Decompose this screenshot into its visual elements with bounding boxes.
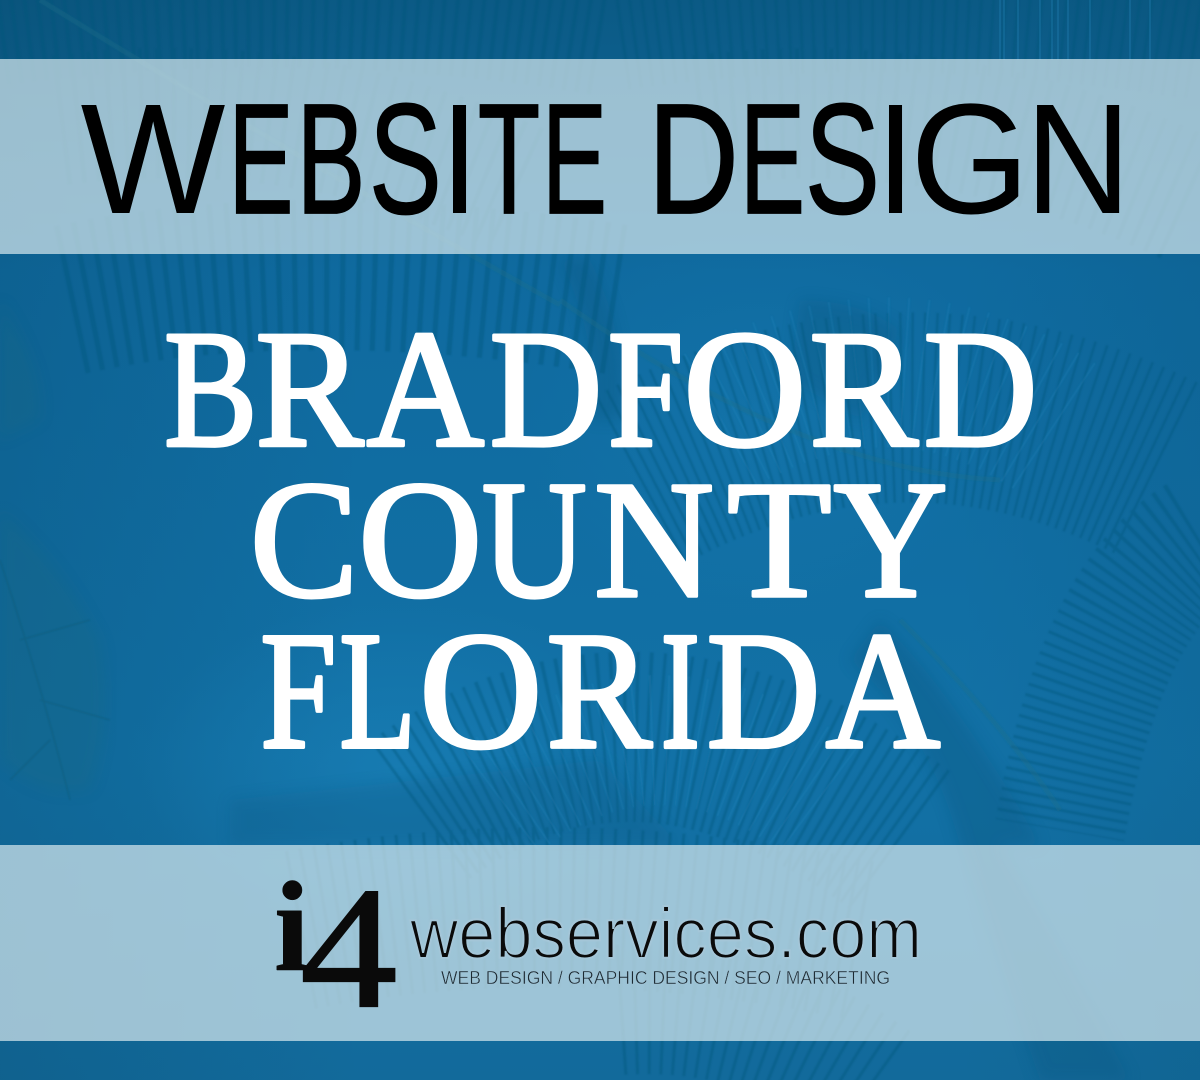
band: top heading bbox=[0, 59, 1200, 254]
main title: Bradford County Florida: C bbox=[250, 447, 358, 633]
heading: Website Design: E bbox=[542, 71, 607, 247]
heading: Website Design: N bbox=[1025, 72, 1131, 247]
main title: Bradford County Florida: A bbox=[366, 296, 484, 482]
main title: Bradford County Florida: B bbox=[164, 297, 257, 482]
band: bottom logo bbox=[0, 845, 1200, 1041]
logo mark: i4: 4 bbox=[300, 852, 397, 1044]
main title: Bradford County Florida: O bbox=[683, 296, 806, 482]
main title: Bradford County Florida: U bbox=[482, 446, 587, 632]
main title: Bradford County Florida: O bbox=[358, 446, 482, 633]
main title: Bradford County Florida bbox=[164, 295, 1038, 784]
main title: Bradford County Florida: D bbox=[706, 599, 821, 784]
main title: Bradford County Florida: F bbox=[608, 297, 683, 483]
logo tagline: WEB DESIGN / GRAPHIC DESIGN / SEO / MARKETING bbox=[441, 967, 890, 988]
logo wordmark: webservices.com bbox=[409, 895, 922, 974]
main title: Bradford County Florida: Y bbox=[834, 448, 948, 633]
heading: Website Design: E bbox=[228, 71, 293, 247]
logo: i4 webservices.com bbox=[274, 852, 922, 1044]
heading: Website Design bbox=[81, 70, 1131, 247]
main title: Bradford County Florida: F bbox=[260, 599, 336, 784]
main title: Bradford County Florida: D bbox=[489, 296, 602, 483]
logo mark: i4: i bbox=[274, 855, 310, 998]
main title: Bradford County Florida: R bbox=[255, 296, 364, 482]
main title: Bradford County Florida: R bbox=[546, 598, 652, 784]
main title: Bradford County Florida: T bbox=[727, 447, 832, 633]
heading: Website Design: G bbox=[910, 70, 1030, 246]
heading: Website Design: I bbox=[876, 71, 915, 247]
main title: Bradford County Florida: I bbox=[661, 598, 700, 784]
heading: Website Design: S bbox=[369, 71, 442, 247]
main title: Bradford County Florida: D bbox=[923, 297, 1038, 482]
main title: Bradford County Florida: A bbox=[826, 598, 940, 784]
main title: Bradford County Florida: O bbox=[419, 597, 542, 784]
heading: Website Design: T bbox=[478, 72, 540, 247]
main title: Bradford County Florida: L bbox=[340, 598, 416, 784]
midribs bbox=[40, 0, 1060, 810]
heading: Website Design: S bbox=[805, 70, 880, 246]
heading: Website Design: D bbox=[648, 72, 739, 247]
main title: Bradford County Florida: R bbox=[809, 295, 919, 482]
heading: Website Design: I bbox=[440, 71, 479, 247]
heading: Website Design: E bbox=[740, 71, 805, 247]
main title: Bradford County Florida: N bbox=[594, 447, 714, 633]
heading: Website Design: B bbox=[296, 72, 365, 247]
heading: Website Design: W bbox=[81, 71, 225, 246]
